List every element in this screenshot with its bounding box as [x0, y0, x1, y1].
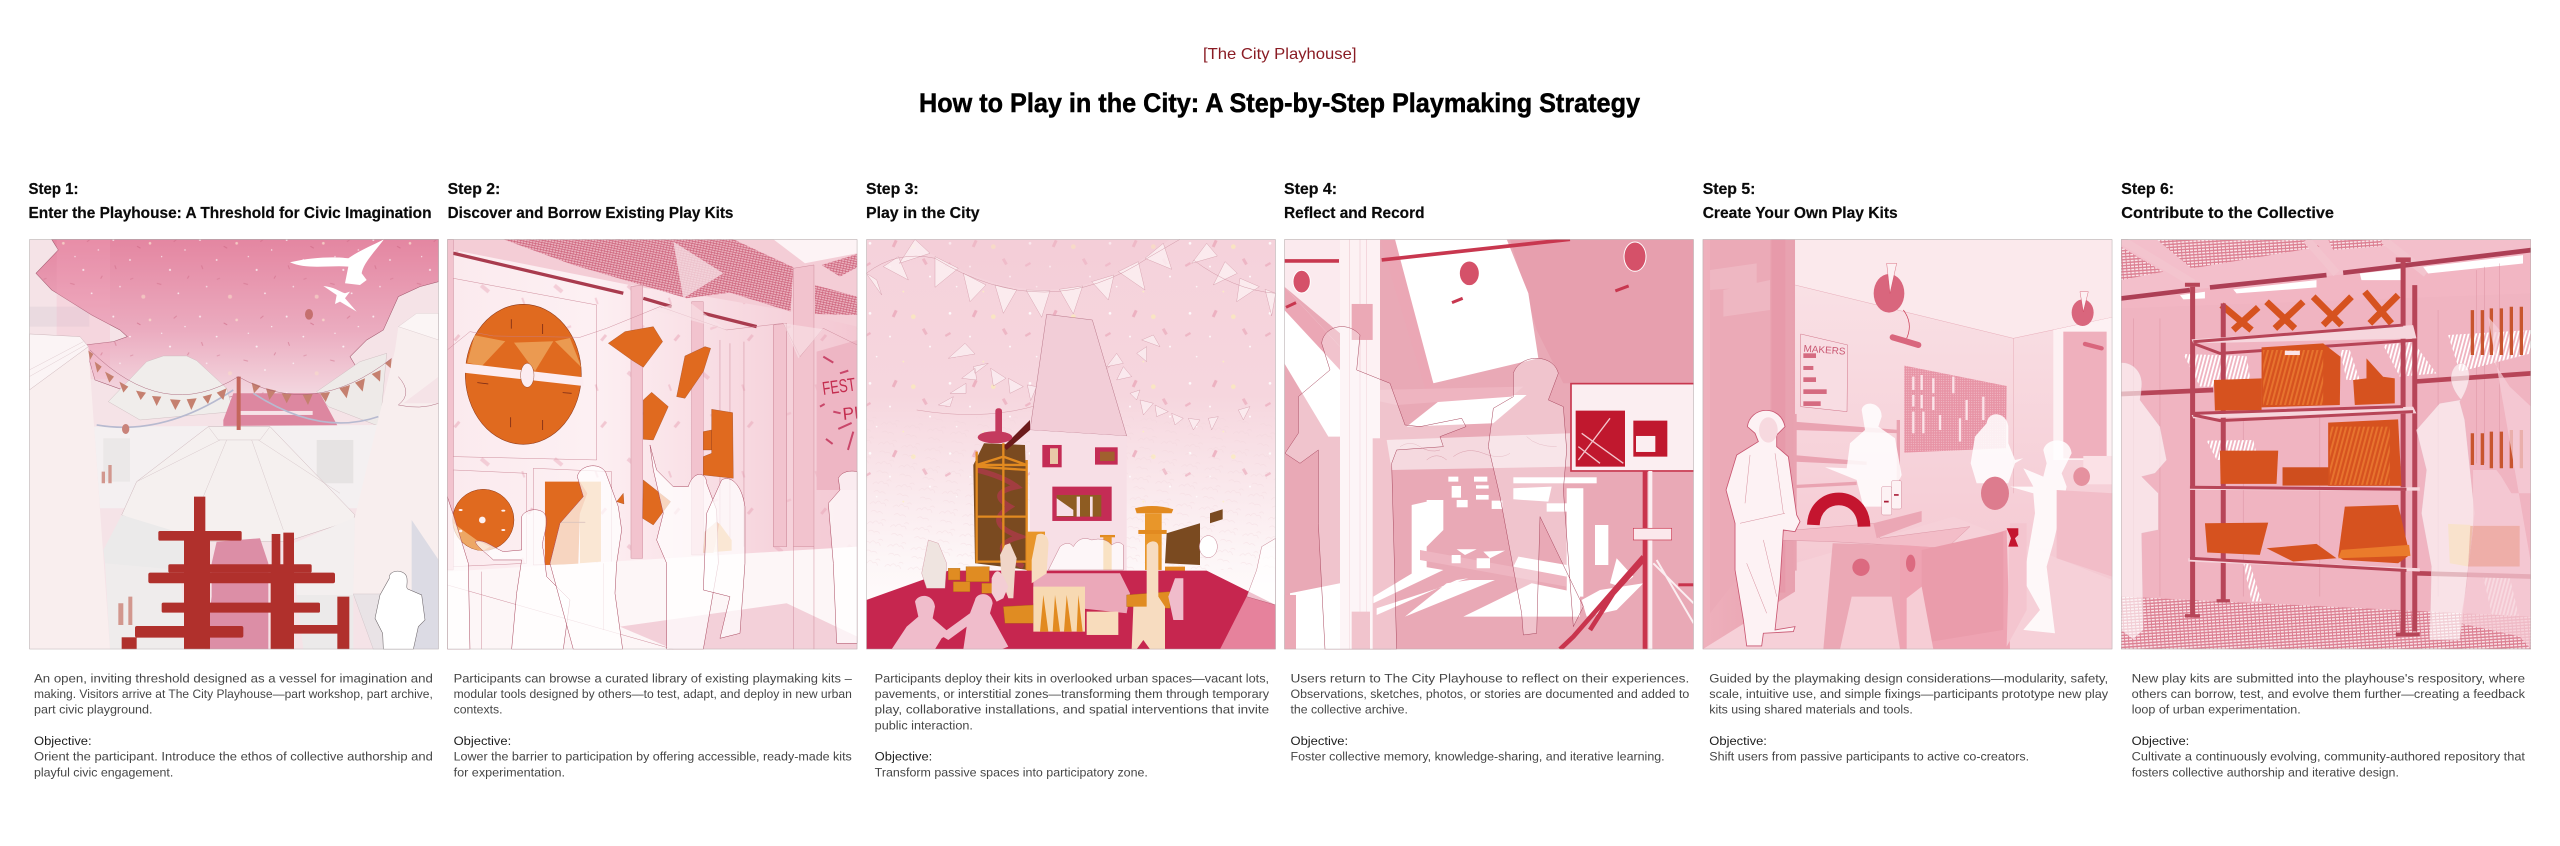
step 6 description: New play kits are submitted into the playhouse's respository, where [2132, 672, 2525, 686]
step 4 description: Users return to The City Playhouse to reflect on their experiences. [1290, 672, 1689, 686]
step 1 heading: Enter the Playhouse: A Threshold for Civic Imagination [28, 205, 432, 222]
poster: PL [842, 402, 865, 424]
pink panel behind frame [205, 538, 268, 649]
pegboard [1904, 366, 2007, 453]
step 1 heading [28, 181, 432, 222]
step 2 heading: Discover and Borrow Existing Play Kits [448, 205, 733, 222]
step 5 description: Objective: [1709, 734, 1767, 748]
step 3 description: Transform passive spaces into participatory zone. [875, 765, 1148, 779]
step 1 description: making. Visitors arrive at The City Playhouse—part workshop, part archive, [34, 687, 433, 701]
ceiling [447, 239, 857, 327]
bunting strings [447, 307, 857, 357]
step 6 description: Cultivate a continuously evolving, community-authored repository that [2132, 750, 2526, 764]
spiral slide tower [973, 408, 1030, 570]
building roof [1030, 314, 1127, 436]
mast [237, 377, 241, 430]
icon: panel kit [545, 482, 601, 565]
workbench underside [1412, 477, 1608, 597]
column [1340, 239, 1380, 649]
step 2 description: modular tools designed by others—to test, adapt, and deploy in new urban [454, 687, 852, 701]
glazed right bay [2053, 317, 2112, 460]
shelf boards [2188, 325, 2420, 572]
panel: step 2 illustration, kit library [447, 239, 865, 650]
step 3 description: Participants deploy their kits in overlooked urban spaces—vacant lots, [875, 672, 1269, 686]
children and visitors silhouettes [892, 534, 1276, 649]
orange spool tables [1027, 506, 1185, 593]
icon: man viewing [375, 571, 425, 649]
counter [447, 547, 857, 649]
step 6 description: Objective: [2132, 734, 2189, 748]
maker figure [1726, 410, 1800, 646]
visitors silhouettes [1285, 327, 1583, 649]
step 4 description: Objective: [1290, 734, 1348, 748]
orange boxes [948, 567, 1170, 623]
orange kit fragments [608, 327, 733, 553]
wall backing [2121, 293, 2531, 649]
icon: hanging reels [1293, 242, 1646, 293]
icon: clamp and grinder [1981, 477, 2018, 547]
step 1 description: part civic playground. [34, 703, 152, 717]
shelf posts [2193, 262, 2415, 635]
step 6 heading: Contribute to the Collective [2121, 205, 2334, 222]
lower roofs [103, 515, 203, 572]
step 5 heading [1703, 181, 1898, 222]
red frame structure [122, 497, 349, 649]
step 2 description: contexts. [454, 703, 502, 717]
MAKERS poster [1801, 334, 1848, 412]
step 6 description: others can borrow, test, and evolve them further—creating a feedback [2132, 687, 2526, 701]
table map [1387, 433, 1570, 470]
panel: step 1 illustration, threshold view [29, 239, 439, 650]
back figures [1825, 404, 2072, 633]
step 1 description: playful civic engagement. [34, 765, 173, 779]
step 3 heading: Play in the City [866, 205, 980, 222]
step 6 heading [2121, 181, 2334, 222]
step 3 description [875, 672, 1270, 779]
table with skirts [1033, 587, 1118, 635]
step 5 description: Guided by the playmaking design considerations—modularity, safety, [1709, 672, 2108, 686]
skylight [1380, 239, 1538, 383]
panel: step 4 illustration, reflect and record [1284, 239, 1694, 650]
step 2 description: Lower the barrier to participation by offering accessible, ready-made kits [454, 750, 852, 764]
step 6 heading: Step 6: [2121, 181, 2174, 198]
floor [866, 571, 1276, 649]
white stripe light patches [2183, 330, 2531, 620]
step 3 description: play, collaborative installations, and spatial interventions that invite [875, 703, 1269, 717]
visitors silhouettes [2121, 317, 2531, 649]
panel: step 6 illustration, repository shelves [2121, 239, 2531, 650]
icon: bottles [1882, 481, 1901, 515]
icon: birds [290, 239, 384, 312]
display board [1571, 384, 1698, 471]
step 2 description [454, 672, 852, 779]
step 4 description: the collective archive. [1290, 703, 1408, 717]
step 5 description: kits using shared materials and tools. [1709, 703, 1913, 717]
step 6 description [2132, 672, 2526, 779]
step 4 description: Observations, sketches, photos, or stories are documented and added to [1290, 687, 1689, 701]
table saw [1775, 511, 2027, 649]
icon: large orange disc kit [463, 304, 583, 444]
step 1 column [28, 181, 439, 779]
step 5 heading: Step 5: [1703, 181, 1755, 198]
step 4 heading [1284, 181, 1424, 222]
step 6 description: fosters collective authorship and iterative design. [2132, 765, 2399, 779]
step 2 heading: Step 2: [448, 181, 500, 198]
step 1 description: Orient the participant. Introduce the ethos of collective authorship and [34, 750, 433, 764]
step 1 description [34, 672, 433, 779]
columns [447, 239, 814, 570]
tripod [1560, 471, 1694, 649]
floor [1703, 517, 2112, 649]
shelving [1793, 414, 1900, 571]
step 2 column [447, 181, 865, 779]
step 5 heading: Create Your Own Play Kits [1703, 205, 1898, 222]
step 1 heading: Step 1: [28, 181, 78, 198]
icon: balloon [305, 309, 313, 320]
step 5 description: Shift users from passive participants to active co-creators. [1709, 750, 2029, 764]
big roof [122, 427, 355, 542]
rail [1284, 239, 1570, 261]
step 2 description: Objective: [454, 734, 511, 748]
icon: wall reels [1874, 263, 2102, 348]
lighter scallops [910, 239, 1170, 290]
back rails [2121, 373, 2531, 577]
step 3 description: public interaction. [875, 718, 973, 732]
step 3 column [866, 181, 1276, 779]
step 4 column [1284, 181, 1698, 764]
bunting [88, 351, 392, 410]
step 6 description: loop of urban experimentation. [2132, 703, 2301, 717]
orange kits on shelves [2205, 343, 2520, 567]
step 3 heading [866, 181, 980, 222]
MAKERS poster: MAKERS [1803, 344, 1846, 358]
bunting middle [938, 335, 1250, 430]
icon: small disc kit [453, 489, 514, 551]
step 3 description: Objective: [875, 750, 932, 764]
step 4 description: Foster collective memory, knowledge-sharing, and iterative learning. [1290, 750, 1665, 764]
step 4 description [1290, 672, 1689, 764]
back roofs [108, 356, 233, 420]
ceiling [2121, 239, 2531, 297]
step 1 description: An open, inviting threshold designed as a vessel for imagination and [34, 672, 433, 686]
windows [1042, 445, 1118, 521]
floor mesh [2121, 597, 2531, 649]
step 2 heading [448, 181, 733, 222]
far bench [2057, 490, 2112, 577]
panel: step 3 illustration, play in the city [866, 239, 1276, 650]
step 2 description: for experimentation. [454, 765, 565, 779]
step 1 description: Objective: [34, 734, 92, 748]
right wall [353, 313, 439, 649]
icon: X kits [2222, 292, 2398, 330]
step 5 column [1703, 181, 2112, 764]
icon: red arch kit [1813, 499, 1864, 527]
left wall [29, 347, 110, 649]
mid storey [94, 425, 378, 508]
step 4 heading: Step 4: [1284, 181, 1337, 198]
small figures [102, 465, 132, 625]
icon: hanging tools [2472, 307, 2521, 468]
step 5 description: scale, intuitive use, and simple fixings—participants prototype new play [1709, 687, 2109, 701]
poster [817, 340, 865, 490]
panel: step 5 illustration, workshop [1702, 239, 2112, 650]
building [1030, 430, 1127, 571]
step 5 description [1709, 672, 2109, 764]
door band [1703, 239, 1795, 649]
step 6 column [2121, 181, 2531, 779]
step 3 description: pavements, or interstitial zones—transforming them through temporary [875, 687, 1270, 701]
step 2 description: Participants can browse a curated library of existing playmaking kits – [454, 672, 852, 686]
rail [453, 253, 757, 327]
bunting top [866, 239, 1276, 317]
step 4 heading: Reflect and Record [1284, 205, 1424, 222]
visitors silhouettes [447, 445, 857, 649]
subtitle: [The City Playhouse] [1203, 46, 1356, 63]
step 3 heading: Step 3: [866, 181, 919, 198]
title: How to Play in the City: A Step-by-Step Playmaking Strategy [919, 88, 1640, 118]
sky [36, 239, 439, 403]
wall panelling [453, 278, 787, 567]
brown planes [1165, 509, 1223, 565]
